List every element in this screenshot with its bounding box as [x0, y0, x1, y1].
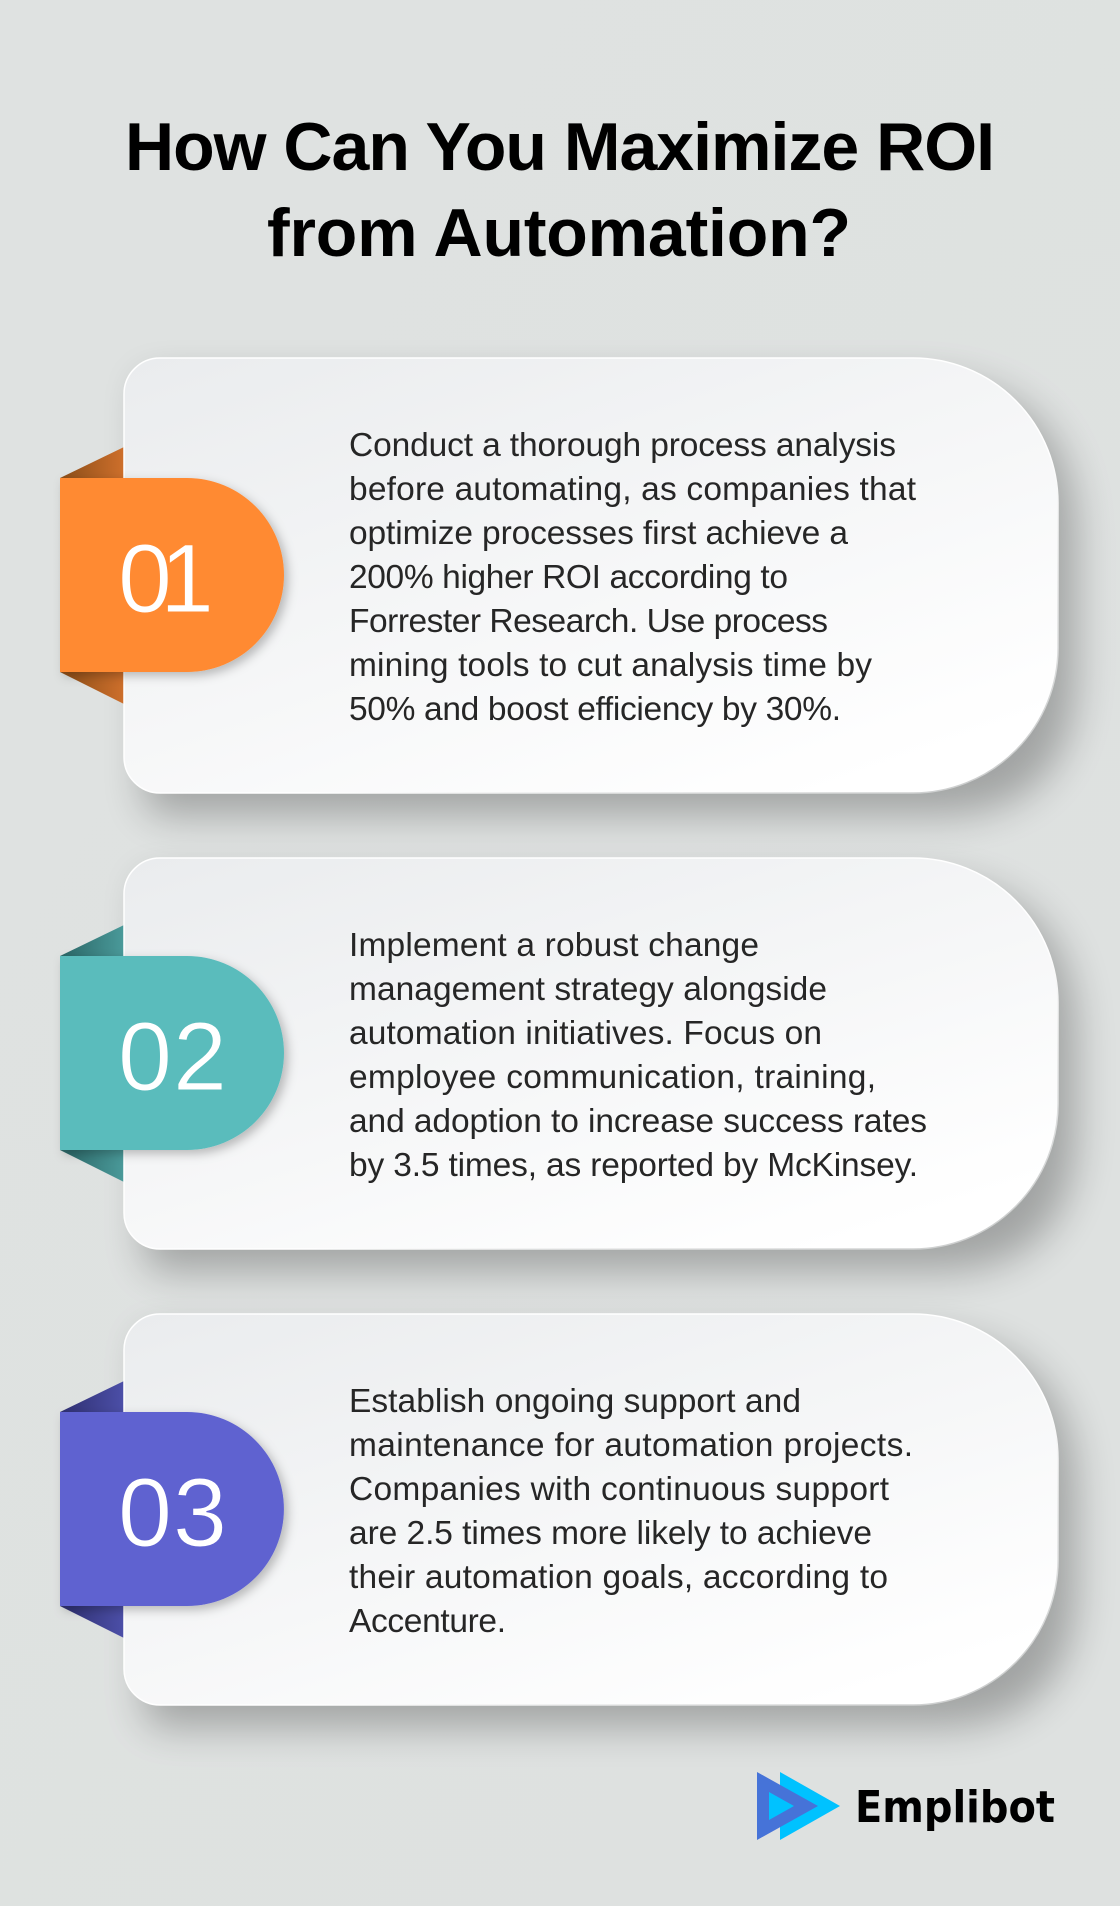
text: step 02: management strategy alongside [349, 971, 827, 1008]
number tab: 01 [60, 478, 284, 672]
number tab: 03 [60, 1412, 284, 1606]
text: step 01: 200% higher ROI according to [349, 559, 788, 596]
text: step 03: are 2.5 times more likely to achieve [349, 1515, 872, 1552]
number tab: 01: 01 [118, 524, 214, 633]
card: step 03 [124, 1314, 1058, 1705]
icon: play triangles [757, 1772, 840, 1840]
text: step 01: 50% and boost efficiency by 30%. [349, 691, 841, 728]
text: step 01: mining tools to cut analysis time by [349, 647, 872, 684]
text: step 02: and adoption to increase success rates [349, 1103, 927, 1140]
panel: step 03 [60, 1314, 1076, 1727]
number tab: 02: 02 [118, 1002, 227, 1111]
number tab: 03: 03 [118, 1458, 227, 1567]
panel: step 02 [60, 858, 1076, 1271]
text: step 03 [349, 1383, 913, 1640]
text: step 01: Conduct a thorough process analysis [349, 427, 896, 464]
panel: step 01 [60, 358, 1076, 815]
fold: step 02 ribbon folds [60, 925, 124, 1182]
text: step 01: Forrester Research. Use process [349, 603, 828, 640]
logo: Emplibot [757, 1772, 1055, 1840]
card: step 02 [124, 858, 1058, 1249]
text: step 02: automation initiatives. Focus on [349, 1015, 822, 1052]
text: step 01: before automating, as companies that [349, 471, 917, 508]
text: step 03: Companies with continuous support [349, 1471, 890, 1508]
text: step 01 [349, 427, 917, 728]
text: step 03: their automation goals, according to [349, 1559, 888, 1596]
text: step 01: optimize processes first achieve a [349, 515, 848, 552]
text: step 03: maintenance for automation projects. [349, 1427, 913, 1464]
card: step 01 [124, 358, 1058, 793]
text: step 02 [349, 927, 927, 1184]
fold: step 03 ribbon folds [60, 1381, 124, 1638]
text: step 02: employee communication, training, [349, 1059, 876, 1096]
text: step 02: Implement a robust change [349, 927, 759, 964]
title: from Automation? [267, 195, 851, 271]
text: step 02: by 3.5 times, as reported by McKinsey. [349, 1147, 918, 1184]
title: How Can You Maximize ROI [125, 109, 995, 185]
title [125, 109, 995, 271]
number tab: 02 [60, 956, 284, 1150]
fold: step 01 ribbon folds [60, 447, 124, 704]
text: step 03: Establish ongoing support and [349, 1383, 801, 1420]
logo: Emplibot: Emplibot [855, 1782, 1055, 1833]
text: step 03: Accenture. [349, 1603, 506, 1640]
